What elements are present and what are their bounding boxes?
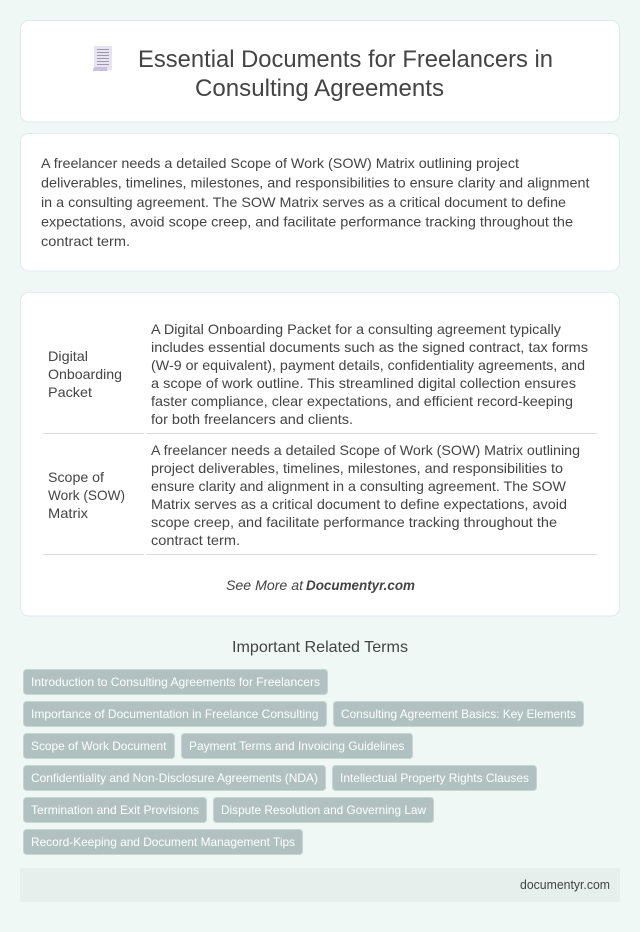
table row: Digital Onboarding Packet: A Digital Onboarding Packet for a consulting agreement typically bbox=[151, 321, 561, 337]
tags: related terms: Introduction to Consulting Agreements for Freelancers bbox=[31, 675, 320, 689]
table row: Scope of Work (SOW) Matrix: scope creep, and facilitate performance tracking throughout the bbox=[151, 514, 557, 530]
panel: summary paragraph: expectations, avoid scope creep, and facilitate performance tracking throughout the bbox=[41, 214, 573, 230]
tags: related terms: Importance of Documentation in Freelance Consulting bbox=[31, 707, 318, 721]
see more link: See More at bbox=[226, 577, 304, 593]
table row: Digital Onboarding Packet: Digital bbox=[48, 348, 88, 364]
title bbox=[138, 46, 553, 102]
tags: related terms: Confidentiality and Non-Disclosure Agreements (NDA) bbox=[31, 771, 318, 785]
heading: important related terms: Important Related Terms bbox=[232, 639, 408, 656]
table row: Digital Onboarding Packet: faster compliance, clear expectations, and efficient record-keeping bbox=[151, 393, 573, 409]
tags: related terms: Termination and Exit Provisions bbox=[31, 803, 199, 817]
panel: summary paragraph: A freelancer needs a detailed Scope of Work (SOW) Matrix outlining project bbox=[41, 155, 519, 171]
footer bbox=[20, 868, 620, 902]
table row: Digital Onboarding Packet: (W-9 or equivalent), payment details, confidentiality agreements, and bbox=[151, 357, 585, 373]
table row: Digital Onboarding Packet: Packet bbox=[48, 384, 92, 400]
table row: Scope of Work (SOW) Matrix bbox=[43, 442, 597, 555]
table row: Scope of Work (SOW) Matrix: project deliverables, timelines, milestones, and responsibilities to bbox=[151, 460, 563, 476]
tags: related terms: Record-Keeping and Document Management Tips bbox=[31, 835, 295, 849]
tags: related terms: Dispute Resolution and Governing Law bbox=[221, 803, 426, 817]
tags: related terms: Consulting Agreement Basics: Key Elements bbox=[341, 707, 576, 721]
table row: Digital Onboarding Packet: a scope of work outline. This streamlined digital collection ensures bbox=[151, 375, 576, 391]
title: Essential Documents for Freelancers in bbox=[138, 46, 553, 73]
table row: Scope of Work (SOW) Matrix: Scope of bbox=[48, 469, 104, 485]
see more link: Documentyr.com bbox=[306, 577, 415, 593]
table row: Digital Onboarding Packet: includes essential documents such as the signed contract, tax forms bbox=[151, 339, 588, 355]
table row: Digital Onboarding Packet: for both freelancers and clients. bbox=[151, 411, 353, 427]
table row: Scope of Work (SOW) Matrix: Work (SOW) bbox=[48, 487, 125, 503]
tags: related terms: Intellectual Property Rights Clauses bbox=[340, 771, 529, 785]
panel: title header bbox=[20, 20, 620, 122]
see more link bbox=[226, 577, 415, 593]
table row: Digital Onboarding Packet bbox=[43, 321, 597, 434]
table row: Digital Onboarding Packet: Onboarding bbox=[48, 366, 122, 382]
panel: summary paragraph: in a consulting agreement. The SOW Matrix serves as a critical document to define bbox=[41, 194, 566, 210]
icon: document scroll bbox=[93, 46, 112, 71]
panel: summary paragraph bbox=[20, 134, 620, 271]
panel: summary paragraph: deliverables, timelines, milestones, and responsibilities to ensure clarity and alignment bbox=[41, 174, 590, 190]
tags: related terms: Payment Terms and Invoicing Guidelines bbox=[189, 739, 404, 753]
table row: Scope of Work (SOW) Matrix: contract term. bbox=[151, 532, 240, 548]
tags: related terms bbox=[24, 670, 584, 854]
panel: summary paragraph: contract term. bbox=[41, 233, 130, 249]
title: Consulting Agreements bbox=[195, 75, 444, 102]
tags: related terms: Scope of Work Document bbox=[31, 739, 167, 753]
table row: Scope of Work (SOW) Matrix: A freelancer needs a detailed Scope of Work (SOW) Matrix outlining bbox=[151, 442, 580, 458]
table row: Scope of Work (SOW) Matrix: ensure clarity and alignment in a consulting agreement. The SOW bbox=[151, 478, 567, 494]
footer: documentyr.com bbox=[520, 877, 610, 892]
panel: documents table bbox=[20, 292, 620, 616]
table row: Scope of Work (SOW) Matrix: Matrix bbox=[48, 505, 88, 521]
table row: Scope of Work (SOW) Matrix: Matrix serves as a critical document to define expectations, avoid bbox=[151, 496, 567, 512]
